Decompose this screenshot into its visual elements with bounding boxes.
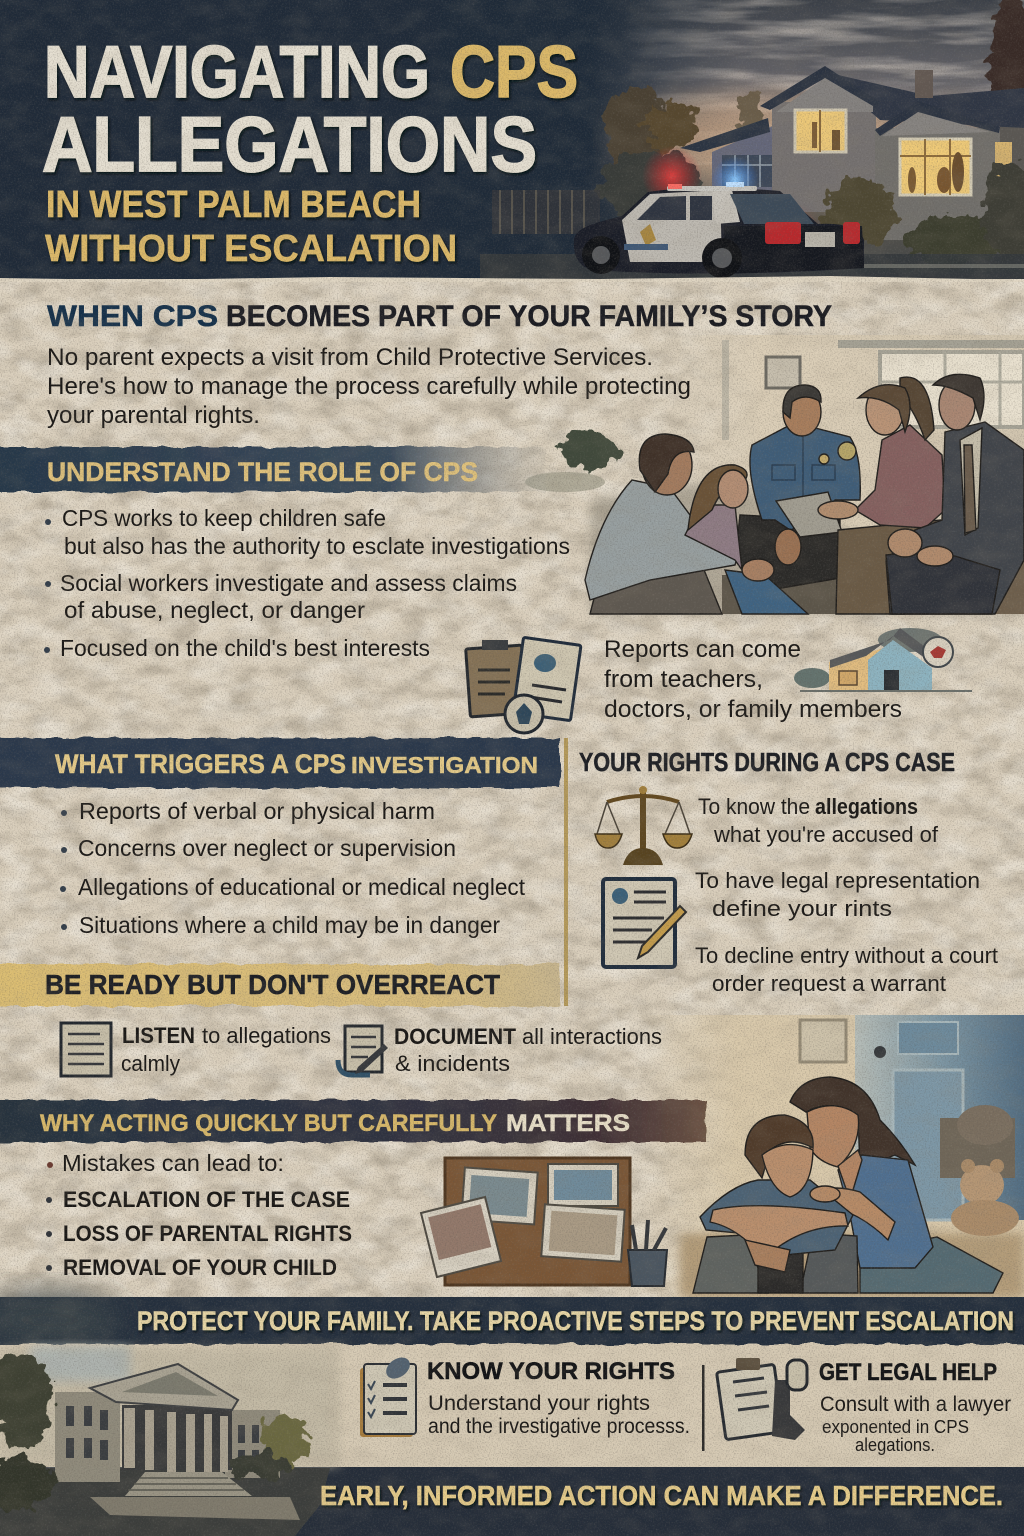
second gable: [875, 101, 1000, 136]
lawyer suit: [886, 422, 1024, 614]
icon: corkboard with photos: [421, 1158, 667, 1286]
father torso: [585, 480, 738, 600]
panel: know your rights: [360, 1353, 690, 1438]
panel: why acting quickly but carefully matters: [0, 1100, 706, 1286]
description: and the irvestigative processs.: [428, 1415, 690, 1438]
text: reports can come from: from teachers,: [604, 666, 763, 693]
icon: notepad: [61, 1023, 111, 1076]
illustration: mother comforting child: [640, 1015, 1024, 1298]
column divider: [564, 738, 568, 1006]
heading: UNDERSTAND THE ROLE OF CPS: [47, 457, 478, 487]
closing band: [0, 1467, 1024, 1536]
door: [855, 1015, 1024, 1220]
floor: [680, 1233, 1024, 1298]
portico interior: [122, 1405, 232, 1470]
listen text: [121, 1023, 331, 1076]
officer head: [783, 388, 821, 436]
consequences list: REMOVAL OF YOUR CHILD: [63, 1255, 337, 1280]
panel: header scene: [0, 0, 1024, 279]
document text: & incidents: [395, 1051, 510, 1076]
columns: [124, 1408, 228, 1474]
panel: when CPS becomes part of your family's story: [47, 300, 832, 429]
listen text: LISTEN: [122, 1023, 195, 1048]
boy shirt: [700, 1180, 853, 1255]
boy: [693, 1115, 858, 1293]
girl head: [718, 470, 748, 508]
roof back: [825, 72, 1024, 128]
intro text: [47, 344, 691, 429]
icon: case documents: [466, 637, 581, 733]
mother hair: [790, 1077, 915, 1168]
right: legal representation: define your rints: [712, 896, 892, 921]
icon: checklist: [360, 1353, 416, 1437]
ponytail: [900, 377, 934, 440]
icon: document and pen: [603, 879, 686, 967]
listen text: to allegations: [202, 1023, 331, 1048]
sofa shadow: [590, 480, 1024, 614]
document text: DOCUMENT: [394, 1024, 517, 1049]
trigger list: Concerns over neglect or supervision: [78, 835, 456, 861]
heading: [55, 749, 538, 779]
bullet 3: Focused on the child's best interests: [60, 635, 430, 661]
description: exponented in CPS: [822, 1417, 969, 1437]
title: IN WEST PALM BEACH: [46, 184, 421, 226]
consequences list: ESCALATION OF THE CASE: [63, 1187, 350, 1212]
mother's hand on shoulder: [810, 1186, 840, 1202]
title: [42, 32, 578, 270]
document text: [394, 1024, 662, 1076]
shrub: [558, 434, 618, 470]
light bar: [667, 186, 757, 191]
boy face: [762, 1145, 813, 1197]
bullet 2: Social workers investigate and assess claims: [60, 570, 517, 596]
intro text: Here's how to manage the process carefully while protecting: [47, 373, 691, 400]
wheels: [582, 236, 620, 274]
sky and lawn: [0, 1348, 340, 1468]
boy trousers: [693, 1235, 768, 1293]
section banner: [0, 447, 545, 492]
torn edge under header: [0, 276, 1024, 282]
father: [585, 434, 738, 614]
woman hand: [818, 501, 858, 519]
officer hand: [775, 529, 801, 565]
trigger list: Situations where a child may be in danger: [79, 912, 500, 938]
heading: BECOMES PART OF YOUR FAMILY’S STORY: [226, 300, 832, 333]
consequences list: [46, 1150, 352, 1280]
icon: small house: [794, 628, 972, 691]
trigger list: Allegations of educational or medical neglect: [78, 874, 526, 900]
girl: [685, 465, 808, 614]
bullet 2: of abuse, neglect, or danger: [64, 597, 365, 623]
shirt pockets: [772, 432, 835, 525]
consequences list: Mistakes can lead to:: [62, 1150, 284, 1176]
right: decline entry: To decline entry without a court: [695, 943, 998, 968]
panel: your rights during a CPS case: [579, 747, 998, 996]
mother arm: [812, 1188, 895, 1240]
document tablet: [776, 492, 842, 537]
side windows: [637, 196, 686, 220]
white door panels: [622, 190, 722, 262]
text: reports can come from: doctors, or family members: [604, 696, 902, 723]
heading: KNOW YOUR RIGHTS: [427, 1358, 675, 1385]
steps: [125, 1472, 252, 1496]
woman torso: [855, 425, 945, 528]
illustration: family meeting with officer: [525, 335, 1024, 614]
trees: [0, 1352, 307, 1508]
description: Consult with a lawyer: [820, 1393, 1011, 1416]
door decal: [640, 224, 656, 246]
heading: INVESTIGATION: [351, 752, 538, 778]
house: [680, 66, 1024, 240]
emergency glows: [642, 146, 702, 206]
icon: document with pen: [338, 1026, 388, 1075]
officer torso: [750, 425, 860, 530]
section banner: [0, 738, 560, 788]
mother face: [807, 1106, 859, 1167]
right: know the allegations: allegations: [815, 794, 918, 819]
boy hair: [745, 1115, 813, 1178]
heading: YOUR RIGHTS DURING A CPS CASE: [579, 747, 955, 777]
right: know the allegations: [698, 794, 939, 847]
title: NAVIGATING: [44, 32, 430, 113]
lawyer hands: [888, 529, 922, 557]
intro text: No parent expects a visit from Child Protective Services.: [47, 344, 653, 371]
woman head: [866, 385, 904, 435]
fence: [492, 190, 600, 234]
panel: get legal help: [717, 1358, 1011, 1455]
window: [838, 340, 1024, 427]
dark banner: [0, 1297, 1024, 1347]
gold banner: [0, 964, 560, 1006]
trigger list: Reports of verbal or physical harm: [79, 798, 435, 824]
boy arms: [710, 1206, 848, 1258]
lit window lower: [900, 139, 971, 195]
lit window upper: [795, 110, 846, 152]
wall picture: [766, 357, 800, 388]
father head: [642, 435, 692, 495]
girl torso: [685, 505, 742, 570]
father trousers: [590, 560, 722, 614]
bullet 1: [45, 505, 570, 559]
title: CPS: [450, 32, 578, 113]
icon: scales of justice: [595, 786, 692, 865]
street: [480, 254, 1024, 279]
clasped hands: [742, 559, 774, 581]
rear lower: [724, 226, 864, 274]
section banner: [0, 1100, 706, 1142]
right: legal representation: [695, 868, 980, 921]
text: reports can come from: [604, 636, 902, 723]
heading: GET LEGAL HELP: [819, 1359, 997, 1386]
mother top: [838, 1155, 933, 1268]
trigger list: [60, 798, 526, 938]
mother: [790, 1077, 1003, 1293]
document text: all interactions: [522, 1024, 662, 1049]
title: ALLEGATIONS: [42, 100, 537, 188]
right: decline entry: [695, 943, 998, 996]
heading: MATTERS: [506, 1110, 630, 1137]
header background: [0, 0, 1024, 279]
bullet 1: CPS works to keep children safe: [62, 505, 386, 531]
text: reports can come from: Reports can come: [604, 636, 801, 663]
mother chest: [838, 1150, 862, 1200]
description: [428, 1392, 690, 1438]
title: WITHOUT ESCALATION: [45, 228, 457, 270]
description: alegations.: [855, 1435, 935, 1455]
woman: [818, 377, 945, 614]
right: legal representation: To have legal representation: [695, 868, 980, 893]
panel: what triggers a CPS investigation: [0, 738, 560, 938]
sky: [540, 0, 1024, 279]
right: decline entry: order request a warrant: [712, 971, 946, 996]
plate: [805, 232, 835, 247]
lawyer trousers: [886, 550, 1000, 614]
vertical divider: [702, 1365, 704, 1451]
right: know the allegations: To know the: [698, 794, 810, 819]
heading: WHAT TRIGGERS A CPS: [55, 749, 346, 779]
illustration: courthouse: [0, 1346, 340, 1536]
bullet 1: but also has the authority to esclate investigations: [64, 533, 570, 559]
wall picture: [800, 1020, 846, 1062]
bullet 2: [45, 570, 517, 623]
consequences list: LOSS OF PARENTAL RIGHTS: [63, 1221, 352, 1246]
woman legs: [836, 520, 940, 614]
tail lights: [765, 222, 801, 244]
car body: [574, 188, 864, 274]
mother trousers: [860, 1237, 1003, 1293]
panel: protect your family call to action: [0, 1290, 1024, 1469]
main wall: [772, 102, 876, 212]
panel: be ready but don't overreact: [0, 964, 560, 1006]
listen text: calmly: [121, 1051, 180, 1076]
heading: BE READY BUT DON'T OVERREACT: [45, 969, 500, 1000]
shrubs: [824, 162, 1024, 268]
lawyer head: [939, 380, 975, 430]
badge and patch: [838, 442, 856, 460]
chimney: [915, 70, 933, 98]
box and teddy bear: [940, 1105, 1019, 1236]
description: [820, 1393, 1011, 1455]
girl hair: [688, 465, 747, 530]
officer: [735, 385, 860, 590]
panel: understand the role of CPS: [0, 447, 570, 661]
main gable: [760, 66, 880, 110]
icon: clipboard and gavel: [717, 1358, 807, 1440]
description: Understand your rights: [428, 1392, 650, 1415]
left wing wall and roof: [712, 125, 780, 195]
right: know the allegations: what you're accused of: [713, 822, 939, 847]
officer legs: [735, 515, 840, 590]
pediment: [90, 1364, 238, 1410]
rear window: [730, 194, 814, 224]
trees behind house: [598, 0, 1024, 221]
wings: [55, 1392, 120, 1482]
police car: [574, 146, 864, 278]
panel: listen and document row: [61, 1023, 662, 1076]
girl legs: [725, 570, 808, 614]
heading: WHEN CPS: [47, 300, 218, 333]
lawyer shirt and tie: [960, 428, 982, 535]
room background: [650, 335, 1024, 614]
wall: [640, 1015, 1024, 1298]
lawyer: [886, 374, 1024, 614]
light panel: [0, 1344, 1024, 1469]
heading: WHY ACTING QUICKLY BUT CAREFULLY: [40, 1110, 497, 1137]
intro text: your parental rights.: [47, 402, 260, 429]
